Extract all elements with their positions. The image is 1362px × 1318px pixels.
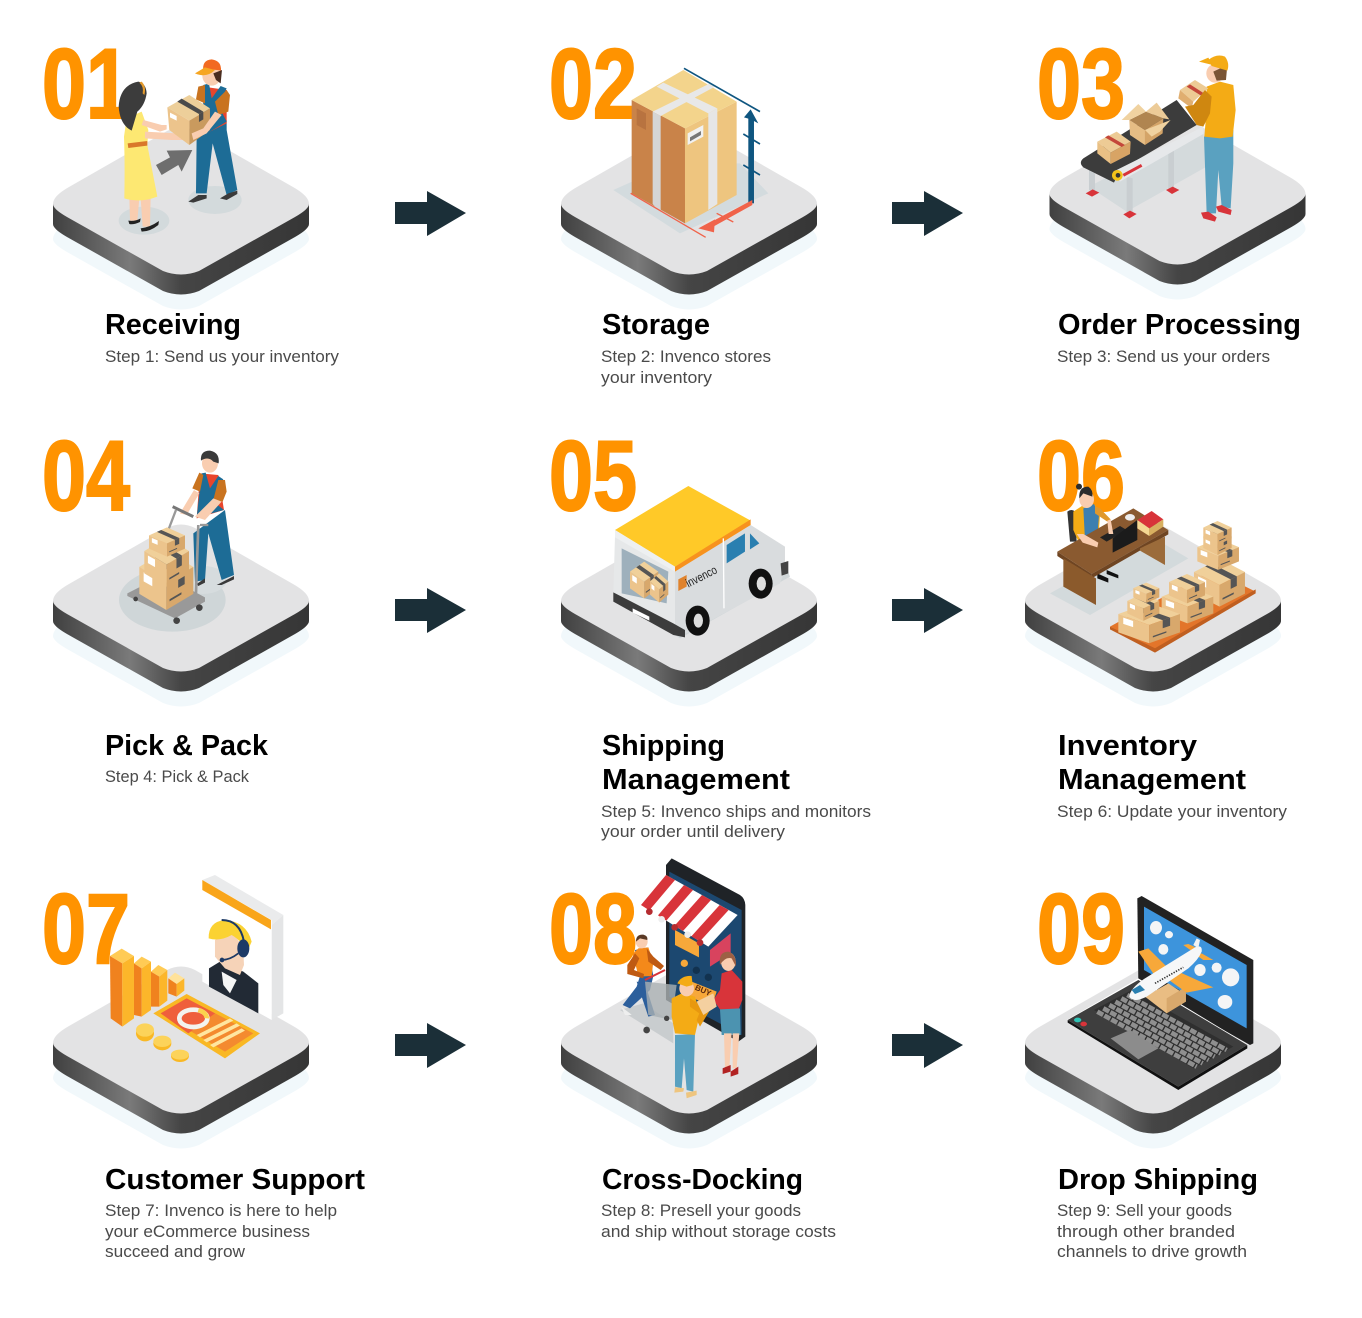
illustration: delivery van: invenco — [684, 564, 720, 591]
title: Pick & Pack — [105, 730, 269, 762]
platform — [561, 524, 817, 706]
number 03: 03 — [1037, 29, 1125, 139]
arrow 7 to 8 — [395, 1023, 466, 1068]
number 09: 09 — [1037, 874, 1125, 984]
description: Step 1: Send us your inventory — [105, 347, 339, 366]
title: Storage — [602, 309, 710, 341]
illustration: handing over a box — [119, 59, 242, 235]
number 02: 02 — [549, 29, 637, 139]
step 5: shipping management — [549, 421, 871, 841]
arrow 2 to 3 — [892, 191, 963, 236]
title: Cross-Docking — [602, 1164, 803, 1196]
description: Step 3: Send us your orders — [1057, 347, 1270, 366]
description — [105, 1201, 337, 1261]
platform — [1025, 966, 1281, 1148]
title: Order Processing — [1058, 309, 1301, 341]
step 4: pick and pack — [42, 421, 309, 786]
title: Customer Support — [105, 1164, 365, 1196]
title — [602, 730, 790, 796]
step 7: customer support — [42, 874, 365, 1261]
description: Step 6: Update your inventory — [1057, 802, 1287, 821]
title: Management — [602, 764, 790, 796]
illustration: tall carton with dimension arrows — [613, 68, 768, 237]
platform — [561, 966, 817, 1148]
title — [1058, 730, 1246, 796]
description: channels to drive growth — [1057, 1242, 1247, 1261]
step 8: cross-docking — [549, 858, 836, 1241]
illustration: laptop with plane and parcel — [1067, 896, 1253, 1090]
description: Step 4: Pick & Pack — [105, 767, 249, 786]
number 08: 08 — [549, 874, 637, 984]
title: Shipping — [602, 730, 725, 762]
description: Step 7: Invenco is here to help — [105, 1201, 337, 1220]
description: your inventory — [601, 368, 713, 387]
number 01: 01 — [42, 29, 130, 139]
number 05: 05 — [549, 421, 637, 531]
description — [1057, 1201, 1247, 1261]
platform — [1050, 118, 1306, 300]
description: and ship without storage costs — [601, 1222, 836, 1241]
illustration: delivery van — [613, 486, 790, 638]
arrow 4 to 5 — [395, 588, 466, 633]
illustration: worker pushing a trolley — [119, 451, 234, 632]
number 06: 06 — [1037, 421, 1125, 531]
title: Receiving — [105, 309, 241, 341]
platform — [561, 128, 817, 310]
platform — [53, 524, 309, 706]
step 2: storage — [549, 29, 817, 387]
title: Drop Shipping — [1058, 1164, 1258, 1196]
platform — [1025, 524, 1281, 706]
platform — [53, 966, 309, 1148]
arrow 8 to 9 — [892, 1023, 963, 1068]
title: Management — [1058, 764, 1246, 796]
description: Step 2: Invenco stores — [601, 347, 771, 366]
description: your eCommerce business — [105, 1222, 310, 1241]
illustration: phone storefront and shoppers: BUY — [694, 983, 713, 998]
description: Step 9: Sell your goods — [1057, 1201, 1232, 1220]
number 04: 04 — [42, 421, 130, 531]
description — [601, 802, 871, 841]
arrow 5 to 6 — [892, 588, 963, 633]
number 07: 07 — [42, 874, 130, 984]
description: Step 8: Presell your goods — [601, 1201, 801, 1220]
description: succeed and grow — [105, 1242, 246, 1261]
title: Inventory — [1058, 730, 1197, 762]
description: through other branded — [1057, 1222, 1235, 1241]
arrow 1 to 2 — [395, 191, 466, 236]
illustration: support agent, charts and phone — [110, 875, 283, 1062]
step 9: drop shipping — [1025, 874, 1281, 1261]
step 6: inventory management — [1025, 421, 1287, 821]
illustration: worker at conveyor — [1081, 56, 1236, 222]
illustration: desk and stock on a pallet — [1050, 484, 1256, 653]
platform — [53, 128, 309, 310]
description — [601, 347, 771, 387]
description: your order until delivery — [601, 822, 786, 841]
illustration: phone storefront and shoppers — [620, 858, 745, 1098]
description: Step 5: Invenco ships and monitors — [601, 802, 871, 821]
step 3: order processing — [1037, 29, 1306, 366]
description — [601, 1201, 836, 1241]
step 1: receiving — [42, 29, 339, 366]
